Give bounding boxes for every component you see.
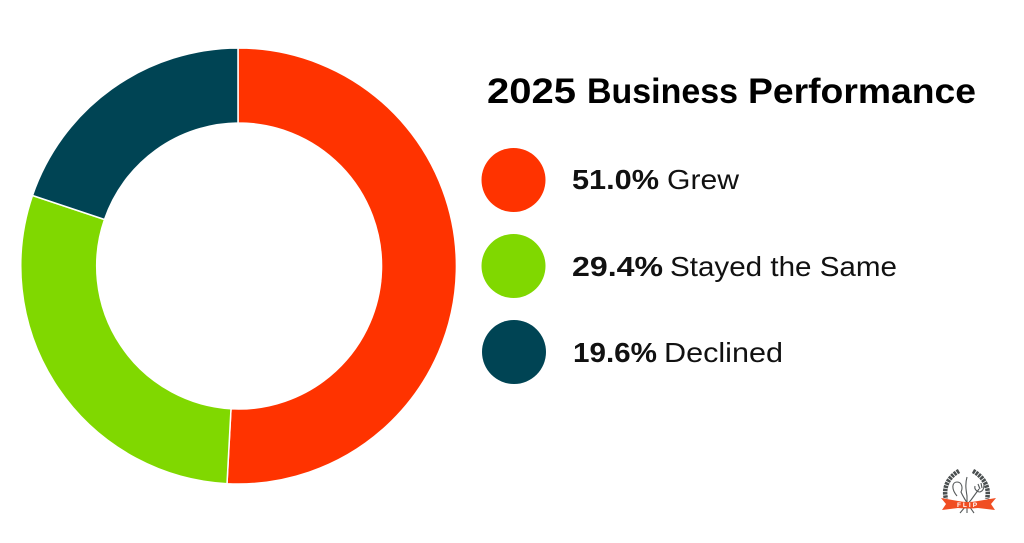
legend item: Stayed the Same bbox=[482, 234, 897, 298]
title: Business bbox=[587, 72, 738, 111]
logo: FLIP bbox=[941, 471, 996, 513]
segment: Declined 19.6% bbox=[32, 48, 238, 220]
legend item: Stayed the Same: 29.4% bbox=[572, 251, 663, 282]
legend item: Grew bbox=[482, 148, 739, 212]
title bbox=[487, 72, 976, 111]
legend item: Grew: Grew bbox=[667, 164, 739, 195]
legend item: Declined: Declined bbox=[664, 337, 783, 368]
legend item: Declined bbox=[482, 320, 783, 384]
legend bbox=[482, 148, 897, 384]
title: Performance bbox=[748, 72, 976, 111]
icon: wheat wreath bbox=[945, 471, 988, 499]
legend item: Stayed the Same: Stayed the Same bbox=[670, 251, 897, 282]
banner bbox=[941, 498, 996, 510]
icon: spoon, knife and fork bbox=[953, 477, 984, 513]
segment: Grew 51.0% bbox=[227, 48, 456, 484]
donut chart bbox=[21, 48, 456, 484]
title: 2025 bbox=[487, 72, 576, 111]
segment: Stayed the Same 29.4% bbox=[21, 196, 231, 484]
legend item: Grew: 51.0% bbox=[572, 164, 659, 195]
legend item: Declined: 19.6% bbox=[573, 337, 657, 368]
banner text: FLIP bbox=[957, 502, 979, 509]
